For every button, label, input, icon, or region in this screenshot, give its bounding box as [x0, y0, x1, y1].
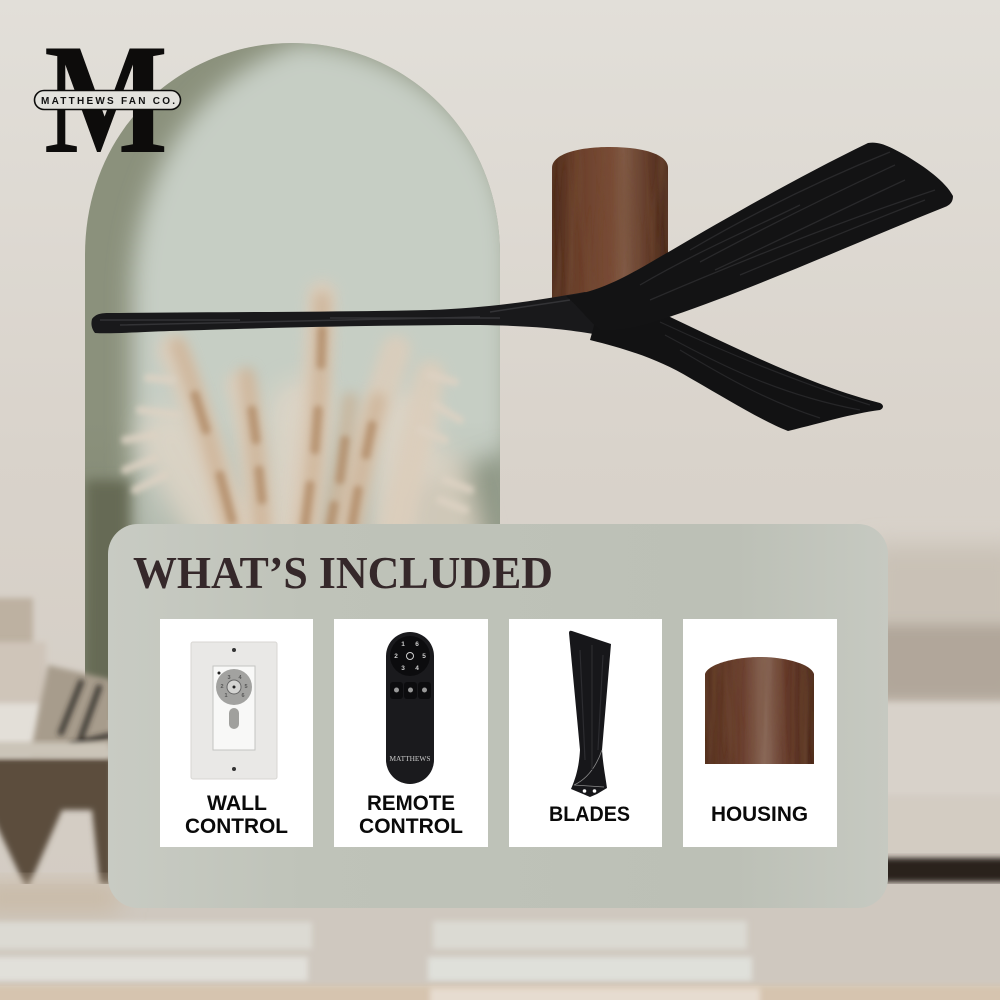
icon: remote: 1: [401, 641, 405, 648]
label: CONTROL: [185, 814, 288, 838]
label: HOUSING: [711, 802, 808, 826]
brand name pill: MATTHEWS FAN CO.: [41, 96, 175, 107]
left armchair and throw: [0, 598, 112, 890]
icon: wall plate: 3: [227, 675, 231, 681]
panel: what's included: [108, 524, 888, 908]
arch alcove: [85, 43, 500, 685]
icon: housing: [705, 657, 814, 764]
heading: WHAT’S INCLUDED: [133, 547, 553, 598]
label: [185, 791, 288, 838]
ceiling fan: [91, 143, 953, 431]
logo: Matthews Fan Co.: [34, 12, 180, 187]
label: REMOTE: [367, 791, 455, 815]
right sofa: [870, 545, 1000, 882]
arch rim highlight: [499, 255, 503, 530]
icon: wall plate: 6: [241, 693, 245, 699]
icon: remote: 5: [422, 653, 426, 660]
icon: remote: 6: [415, 641, 419, 648]
icon: wall plate: 4: [238, 675, 242, 681]
panel background: [108, 524, 888, 908]
icon: wall plate: 5: [244, 684, 248, 690]
three black blades: [91, 143, 953, 431]
icon: blade: [569, 631, 611, 797]
wood housing: [552, 147, 668, 305]
brand name pill: [34, 90, 180, 110]
pampas grass: [125, 295, 470, 540]
left blade: [91, 292, 610, 335]
card: blades: [509, 619, 662, 847]
icon: remote: 4: [415, 665, 419, 672]
card: wall control: [160, 619, 313, 847]
label: BLADES: [549, 802, 630, 826]
icon: wall plate: 2: [220, 684, 224, 690]
lower right blade: [590, 316, 883, 431]
label: WALL: [207, 791, 267, 815]
floor: [0, 884, 1000, 1000]
icon: wall plate: [191, 642, 277, 779]
icon: remote: 3: [401, 665, 405, 672]
icon: remote: [386, 632, 434, 784]
label: [359, 791, 463, 838]
card: remote control: [334, 619, 488, 847]
icon: wall plate: 1: [224, 693, 228, 699]
icon: remote: 2: [394, 653, 398, 660]
icon: remote: MATTHEWS: [390, 755, 431, 763]
card: housing: [683, 619, 837, 847]
upper right blade: [566, 143, 953, 330]
label: CONTROL: [359, 814, 463, 838]
monogram M: M: [44, 12, 168, 187]
